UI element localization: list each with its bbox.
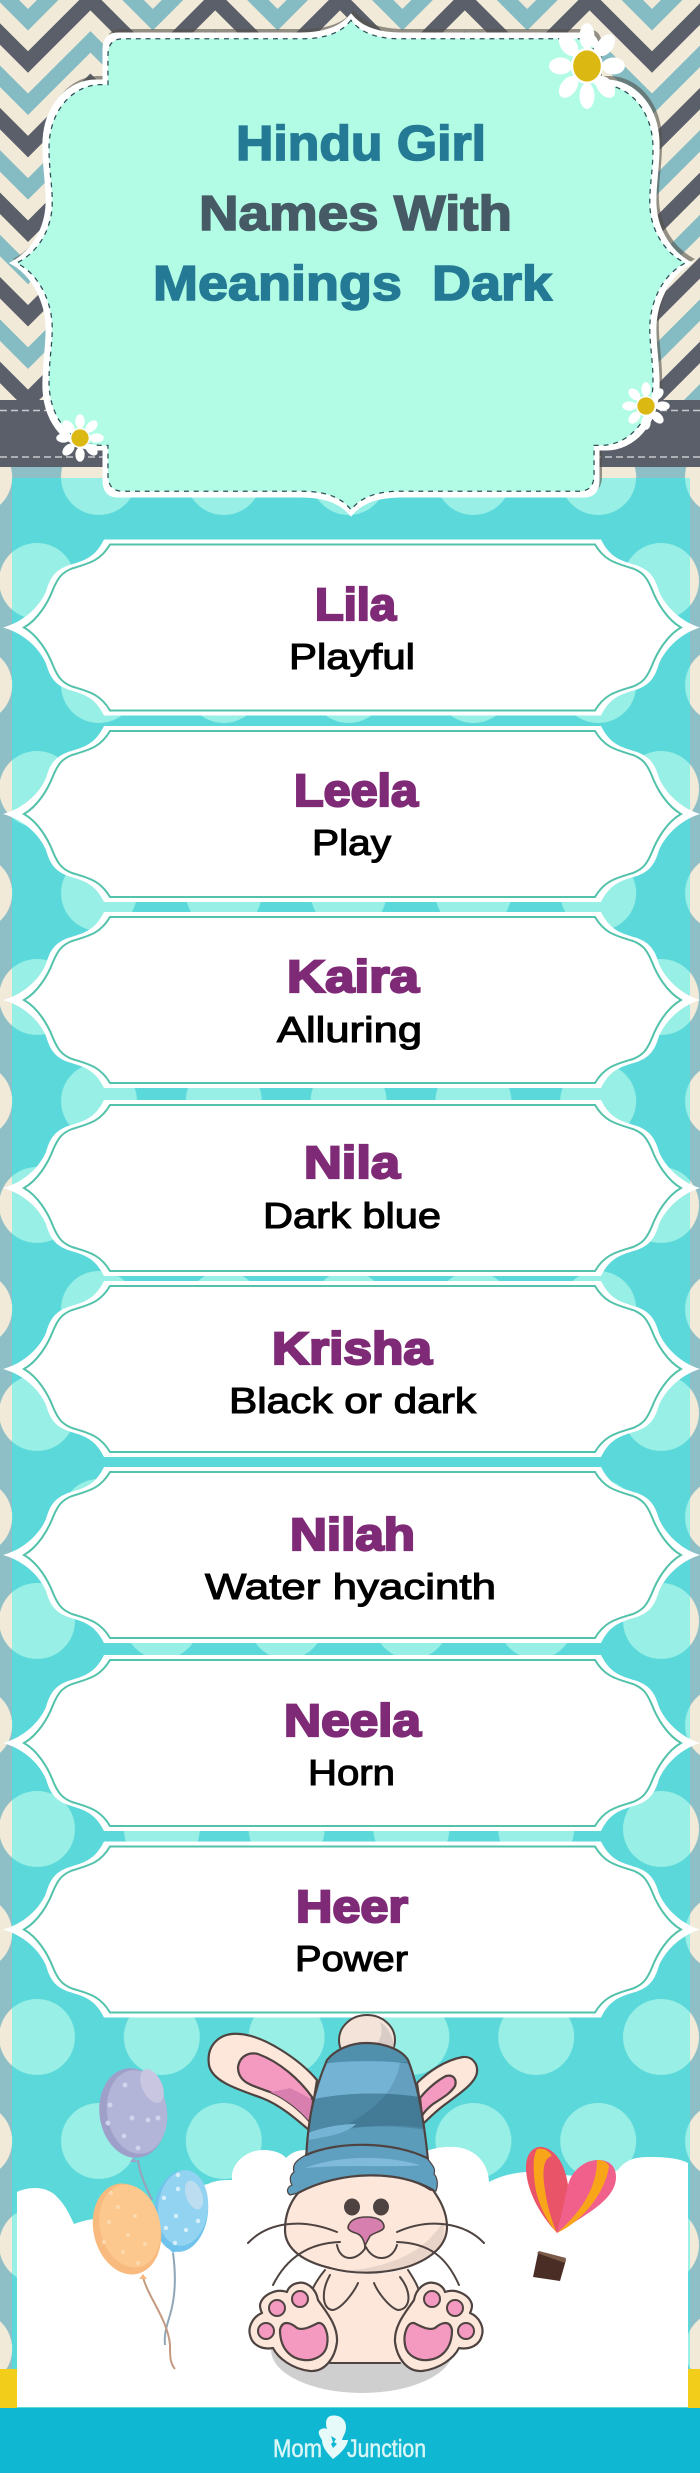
card: Nilah: Water hyacinth bbox=[205, 1566, 496, 1607]
icon: daisy bottom left bbox=[56, 414, 104, 462]
logo wordmark right: Junction bbox=[347, 2435, 426, 2463]
hat body bbox=[305, 2042, 430, 2160]
hat brim bbox=[288, 2145, 437, 2195]
logo: MomJunction bbox=[273, 2415, 426, 2463]
card: Nilah bbox=[3, 1467, 700, 1643]
nose bbox=[348, 2217, 384, 2246]
dark ribbon band bbox=[0, 400, 700, 467]
card: Lila bbox=[3, 540, 700, 716]
card: Leela: Play bbox=[312, 822, 391, 863]
card: Nilah: Nilah bbox=[290, 1509, 415, 1560]
card: Heer bbox=[3, 1842, 700, 2018]
card: Krisha bbox=[3, 1281, 700, 1457]
left ear bbox=[209, 2034, 317, 2130]
title: Names With bbox=[199, 187, 512, 241]
hat pom-pom bbox=[339, 2015, 395, 2065]
card: Nila bbox=[3, 1100, 700, 1276]
logo wordmark left: Mom bbox=[273, 2435, 322, 2463]
card: Lila: Playful bbox=[289, 636, 415, 677]
card: Krisha: Krisha bbox=[272, 1323, 433, 1374]
bunny shadow bbox=[271, 2307, 453, 2393]
body bbox=[313, 2268, 418, 2363]
title frame panel bbox=[10, 10, 695, 516]
icon: bunny illustration bbox=[209, 2015, 484, 2393]
left foot bbox=[250, 2283, 337, 2371]
card: Leela: Leela bbox=[294, 765, 419, 816]
head bbox=[285, 2175, 447, 2273]
yellow edge accents bbox=[0, 2369, 700, 2408]
title: Hindu Girl bbox=[236, 117, 486, 171]
card: Krisha: Black or dark bbox=[229, 1380, 477, 1421]
right arm bbox=[374, 2277, 408, 2310]
card: Neela bbox=[3, 1655, 700, 1831]
whiskers bbox=[248, 2224, 484, 2285]
icon: daisy bottom right bbox=[622, 382, 670, 430]
card: Kaira bbox=[3, 912, 700, 1088]
card: Nila: Dark blue bbox=[263, 1195, 441, 1236]
card: Heer: Power bbox=[295, 1938, 408, 1979]
card: Lila: Lila bbox=[315, 579, 397, 630]
right foot bbox=[395, 2283, 482, 2371]
left arm bbox=[324, 2275, 358, 2310]
mouth bbox=[337, 2245, 397, 2258]
footer bar bbox=[0, 2408, 700, 2473]
white cloud ground bbox=[17, 2147, 688, 2407]
chevron pattern header background bbox=[0, 0, 700, 443]
body sides bbox=[313, 2270, 418, 2288]
body bottom line bbox=[330, 2362, 400, 2364]
card: Kaira: Kaira bbox=[287, 951, 420, 1002]
right ear bbox=[417, 2057, 477, 2124]
eyes bbox=[344, 2198, 389, 2216]
card: Leela bbox=[3, 726, 700, 902]
card: Nila: Nila bbox=[304, 1137, 401, 1188]
card: Neela: Horn bbox=[308, 1752, 395, 1793]
title: Meanings Dark bbox=[153, 257, 553, 311]
card: Neela: Neela bbox=[284, 1695, 422, 1746]
card: Heer: Heer bbox=[296, 1881, 408, 1932]
logo icon bbox=[319, 2415, 348, 2459]
icon: daisy top right bbox=[549, 23, 625, 109]
icon: heart hot air balloon bbox=[526, 2147, 616, 2233]
title bbox=[153, 117, 553, 311]
icon: balloons bbox=[84, 2064, 212, 2369]
card: Kaira: Alluring bbox=[277, 1009, 422, 1050]
icon: balloon basket bbox=[533, 2251, 566, 2281]
